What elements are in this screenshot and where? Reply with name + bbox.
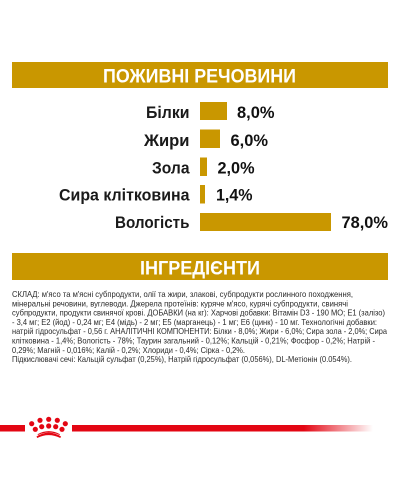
text block: composition: 0,29%; Магній - 0,016%; Калій - 0,2%; Хлориди - 0,4%; Сірка - 0,2%. bbox=[12, 345, 245, 355]
text block: composition: Підкислювачі сечі: Кальцій сульфат (0,25%), Натрій гідросульфат (0,056%), DL-Метіонін (0.054%). bbox=[12, 354, 352, 364]
row: fibre: Сира клітковина bbox=[59, 187, 190, 205]
row: moisture: 78,0% bbox=[342, 214, 388, 232]
text block: composition: СКЛАД: м'ясо та м'ясні субпродукти, олії та жири, злакові, субпродукти рослинного походження, bbox=[12, 289, 353, 299]
row: protein: 8,0% bbox=[237, 104, 275, 122]
row: ash: Зола bbox=[152, 160, 190, 178]
bar chart: nutrients bbox=[59, 102, 388, 232]
row: fibre: 1,4% bbox=[216, 187, 253, 205]
row: fibre bbox=[59, 185, 253, 205]
icon: royal crown logo bbox=[29, 417, 68, 438]
row: ash bbox=[152, 158, 255, 178]
row: protein: Білки bbox=[146, 104, 190, 122]
row: protein bbox=[146, 102, 275, 122]
row: fat bbox=[143, 130, 268, 150]
text block: composition: мінеральні речовини, вуглеводи. Джерела протеїнів: куряче м'ясо, курячі субпродукти, свинячі bbox=[12, 298, 348, 308]
text block: composition bbox=[12, 289, 387, 364]
row: fat: Жири bbox=[143, 132, 190, 150]
row: ash: 2,0% bbox=[218, 160, 255, 178]
heading: ingredients: ІНГРЕДІЄНТИ bbox=[140, 258, 260, 280]
row: moisture: Вологість bbox=[115, 214, 190, 232]
heading: nutrients bbox=[12, 62, 388, 88]
heading: nutrients: ПОЖИВНІ РЕЧОВИНИ bbox=[103, 66, 296, 88]
text block: composition: клітковина - 1,4%; Вологість - 78%; Таурин загальний - 0,12%; Кальцій - 0,21%; Фосфор - 0,2%; Натрій - bbox=[12, 336, 375, 346]
heading: ingredients bbox=[12, 253, 388, 280]
footer red line bbox=[0, 425, 373, 432]
row: moisture bbox=[115, 213, 388, 232]
row: fat: 6,0% bbox=[230, 132, 268, 150]
